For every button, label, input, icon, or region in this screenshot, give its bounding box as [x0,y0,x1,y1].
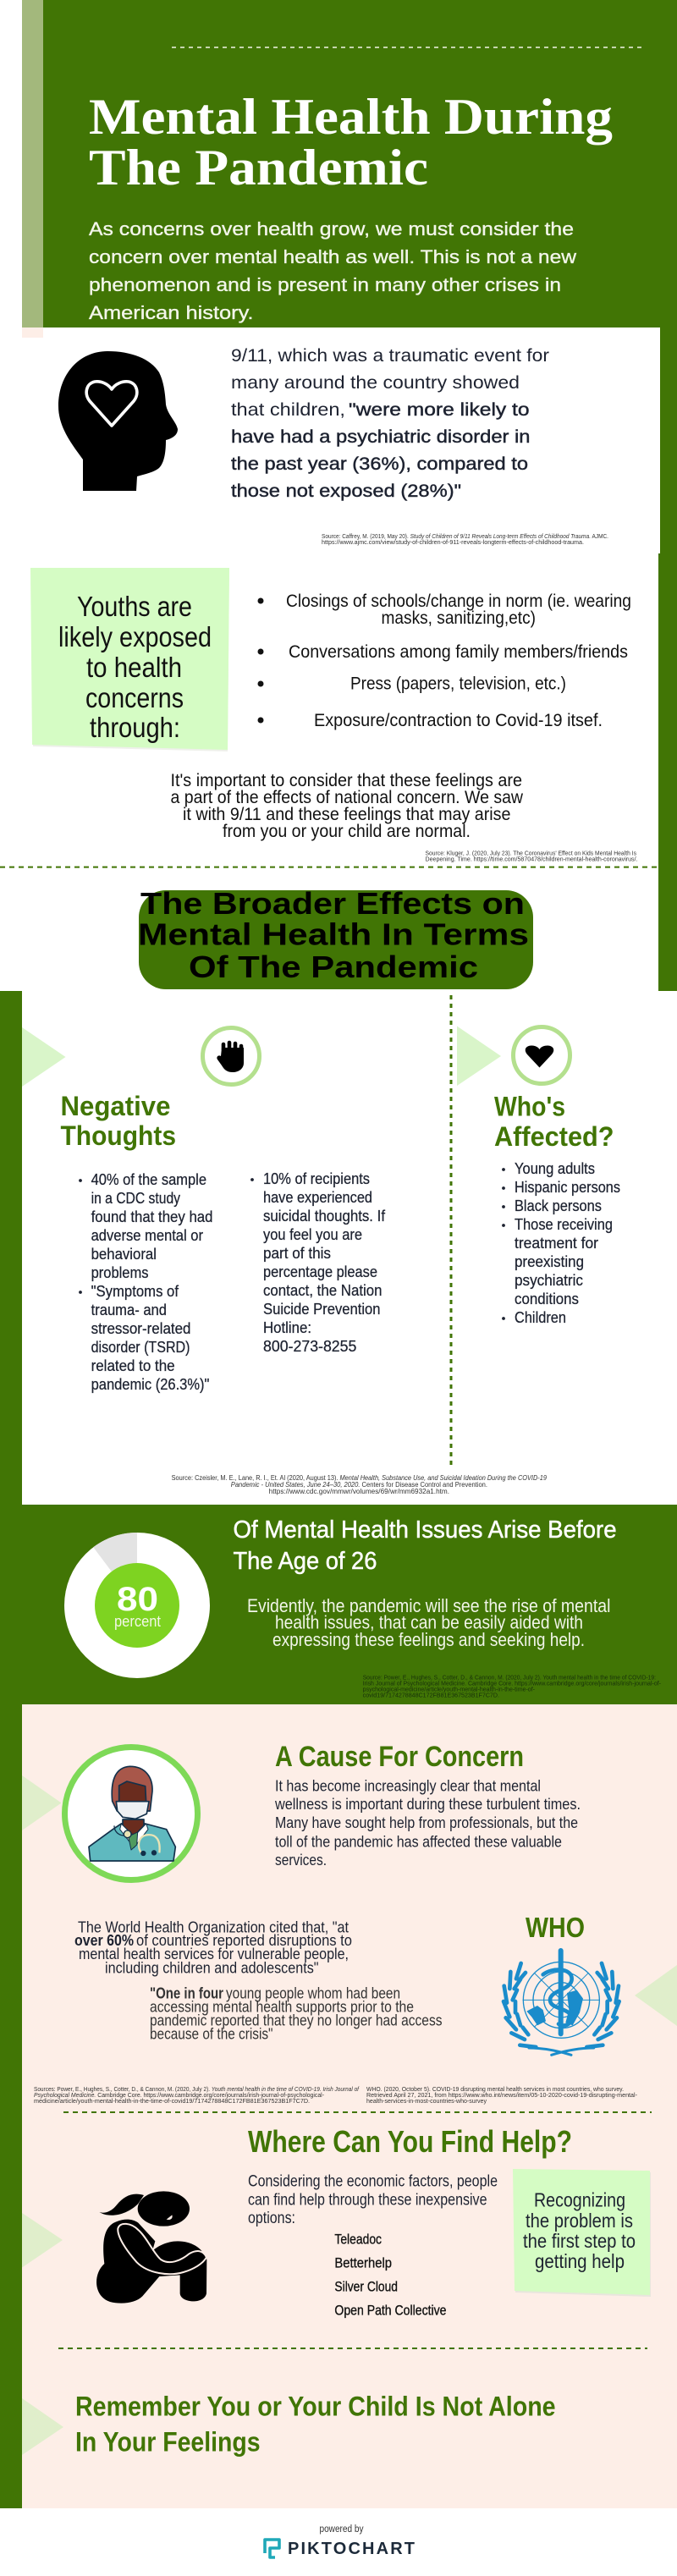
list: negative thoughts statistics: related to the [91,1357,175,1374]
9/11 text: have had a psychiatric disorder in [231,427,530,447]
9/11 text: many around the country showed [231,373,520,393]
icon: piktochart mark [265,2540,279,2557]
text: WHO citation: over 60% [74,1931,134,1949]
list: affected groups: Those receiving [515,1216,613,1233]
text: WHO citation [74,1918,352,1976]
list: affected groups: conditions [515,1291,579,1307]
list: negative thoughts statistics: stressor-related [91,1320,191,1337]
source: Czeisler: https://www.cdc.gov/mmwr/volumes/69/wr/mm6932a1.htm. [269,1488,449,1495]
text: national concern [171,771,524,841]
list: help options: Open Path Collective [334,2302,447,2318]
intro paragraph [89,218,576,323]
source: Power and WHO references [34,2087,638,2105]
arrow: triangle marker [22,2398,63,2455]
text: evidently: expressing these feelings and seeking help. [272,1629,585,1650]
panel: WHO disruption [34,1912,677,2105]
text: evidently: Evidently, the pandemic will see the rise of mental [247,1595,610,1616]
list: negative thoughts statistics: "Symptoms of [91,1283,179,1300]
text: cause paragraph: services. [275,1851,327,1869]
text: one in four quote: because of the crisis" [150,2026,272,2043]
list: affected groups: psychiatric [515,1272,583,1289]
text: WHO citation: mental health services for vulnerable people, [79,1945,349,1962]
list: hotline: you feel you are [263,1226,362,1243]
icon: WHO logo [504,1951,619,2055]
list: negative thoughts statistics: problems [91,1264,149,1281]
icon: sad girl [96,2191,206,2304]
text: one in four quote [150,1985,442,2043]
9/11 text: "were more likely to [349,400,530,420]
list: affected groups: Hispanic persons [515,1179,620,1196]
heading: negative thoughts: Negative [61,1091,171,1121]
panel: youth exposure [30,568,638,863]
list: negative thoughts statistics: disorder (TSRD) [91,1339,190,1356]
list: help options: Silver Cloud [334,2278,398,2295]
arrow: triangle marker [22,1027,66,1087]
text: economic factors: Considering the economic factors, people [248,2173,498,2191]
list: hotline: Hotline: [263,1319,311,1336]
footer: piktochart logo: PIKTOCHART [288,2540,415,2558]
list: hotline: percentage please [263,1263,377,1280]
heading: a cause for concern: A Cause For Concern [275,1741,524,1773]
list: hotline: part of this [263,1245,331,1262]
list: help options [334,2232,447,2318]
callout: youths note: concerns [85,682,184,713]
source: Power [363,1675,662,1698]
list: exposure sources: Closings of schools/change in norm (ie. wearing [286,592,631,611]
heading: WHO: WHO [526,1912,585,1943]
source: Power: Source: Power, E., Hughes, S., Cotter, D., & Cannon, M. (2020, July 2). Youth mental health in the time of COVID-19: [363,1675,656,1681]
heading: not alone: Remember You or Your Child Is Not Alone [75,2392,556,2422]
heading: mental health issues age: The Age of 26 [234,1548,377,1575]
panel: negative thoughts [22,1027,386,1393]
list: negative thoughts statistics: pandemic (26.3%)" [91,1376,209,1393]
footer: piktochart logo [265,2524,415,2558]
text: WHO citation: including children and adolescents" [105,1958,318,1976]
list: hotline: contact, the Nation [263,1282,383,1299]
source: Caffrey: https://www.ajmc.com/view/study-of-children-of-911-reveals-longterm-effects-of-childhood-trauma. [322,540,584,546]
text: cause paragraph: wellness is important during these turbulent times. [274,1795,581,1813]
text: national concern: it with 9/11 and these feelings that may arise [183,805,511,824]
panel: a cause for concern [22,1704,677,2508]
list: negative thoughts statistics: adverse mental or [91,1227,203,1244]
list: affected groups: Children [515,1309,566,1326]
list: exposure sources [257,592,631,730]
9/11 text: that children, [231,400,345,420]
text: economic factors [248,2173,498,2227]
text: evidently [247,1595,610,1650]
list: hotline [250,1170,386,1355]
text: national concern: It's important to consider that these feelings are [171,771,522,790]
text: national concern: from you or your child are normal. [223,822,471,841]
text: WHO citation: The World Health Organization cited that, "at [78,1918,349,1936]
source: Czeisler [172,1474,547,1495]
list: hotline: 800-273-8255 [263,1338,356,1355]
list: affected groups [502,1160,620,1326]
source: Power and WHO references: Psychological Medicine. Cambridge Core. https://www.cambridge.org/core/journals/irish-journal-of-psychological- [34,2093,325,2099]
chart: donut 80 percent: 80 [117,1581,158,1618]
arrow: triangle marker [22,1775,61,1830]
arrow: triangle marker [457,1026,501,1086]
text: one in four quote: young people whom had been [226,1985,400,2002]
callout: youths note: to health [86,652,182,683]
text: national concern: a part of the effects of national concern. We saw [171,788,524,807]
heading: broader effects: The Broader Effects on [140,886,525,921]
list: hotline: have experienced [263,1189,372,1206]
heading: broader effects: Of The Pandemic [189,949,478,984]
heading: who's affected: Who's [494,1092,565,1122]
list: hotline: Suicide Prevention [263,1301,381,1318]
panel: closing message [22,2392,556,2458]
text: evidently: health issues, that can be easily aided with [275,1612,583,1633]
intro paragraph: American history. [89,302,254,323]
intro paragraph: concern over mental health as well. This is not a new [89,246,576,267]
panel: where can you find help [22,2124,651,2318]
heading: where can you find help: Where Can You Find Help? [248,2124,572,2159]
heading: not alone: In Your Feelings [75,2427,261,2458]
icon: stop hand [203,1027,259,1085]
text: cause paragraph: Many have sought help from professionals, but the [275,1814,578,1831]
icon: head with heart [58,351,178,491]
9/11 text: those not exposed (28%)" [231,482,461,501]
heading: who's affected [494,1092,614,1152]
heading: negative thoughts: Thoughts [61,1120,176,1151]
intro paragraph: phenomenon and is present in many other crises in [89,274,561,295]
title: Mental Health During [89,89,613,145]
source: Czeisler: Source: Czeisler, M. E., Lane, R. I., Et. Al (2020, August 13). Mental Health, Substance Use, and Suicidal Ideation During the COVID-19 [172,1474,547,1482]
text: cause paragraph: toll of the pandemic has affected these valuable [275,1833,562,1850]
title [89,89,613,195]
panel: title header [22,0,677,328]
list: exposure sources: Conversations among family members/friends [289,642,628,662]
source: Caffrey [322,534,608,546]
source: Kluger [425,851,638,863]
source: Caffrey: Source: Caffrey, M. (2019, May 20). Study of Children of 9/11 Reveals Long-term Effects of Childhood Trauma. AJMC. [322,534,608,540]
callout: recognizing note [513,2169,651,2297]
heading: broader effects [138,886,533,989]
text: WHO citation: of countries reported disruptions to [136,1931,352,1949]
list: negative thoughts statistics: in a CDC study [91,1190,180,1207]
source: Power: psychological-medicine/article/youth-mental-health-in-the-time-of- [363,1687,536,1693]
heading: broader effects: Mental Health In Terms [138,917,529,951]
footer: piktochart logo: powered by [320,2524,364,2535]
text: economic factors: options: [248,2210,295,2227]
list: negative thoughts statistics: 40% of the sample [91,1171,206,1188]
9/11 text: the past year (36%), compared to [231,454,528,474]
panel: 80 percent statistic [22,1505,677,1704]
source: Kluger: Source: Kluger, J. (2020, July 23). The Coronavirus' Effect on Kids Mental Health Is [425,851,636,857]
9/11 text: 9/11, which was a traumatic event for [231,346,549,366]
list: exposure sources: masks, sanitizing,etc) [381,608,536,628]
list: affected groups: Young adults [515,1160,595,1177]
heading: not alone [75,2392,556,2458]
heading: mental health issues age: Of Mental Health Issues Arise Before [234,1516,617,1544]
text: one in four quote: "One in four [150,1985,223,2002]
callout: youths note: Youths are [77,591,192,622]
panel: 9/11 fact [58,346,608,546]
callout: youths note [30,568,229,751]
list: affected groups: Black persons [515,1197,602,1214]
source: Power: covid19/7174278848C172FB81E367523B1F7C7D. [363,1693,499,1698]
text: cause paragraph [274,1776,581,1869]
text: one in four quote: accessing mental health supports prior to the [150,1999,414,2016]
callout: recognizing note: the problem is [526,2210,633,2232]
list: hotline: suicidal thoughts. If [263,1208,386,1225]
title: The Pandemic [89,140,428,195]
heading: mental health issues age [234,1516,617,1575]
callout: youths note: likely exposed [58,621,212,652]
list: negative thoughts statistics [79,1171,213,1393]
list: negative thoughts statistics: behavioral [91,1246,157,1263]
source: Power and WHO references: Sources: Power, E., Hughes, S., Cotter, D., & Cannon, M. (2020, July 2). Youth mental health in the time of COVID-19. Irish Journal of [34,2087,360,2093]
source: Power and WHO references: health-services-in-most-countries-who-survey [366,2099,487,2105]
list: affected groups: preexisting [515,1253,584,1270]
text: one in four quote: pandemic reported that they no longer had access [150,2012,442,2029]
source: Kluger: Deepening. Time. https://time.com/5870478/children-mental-health-coronavirus/. [425,857,638,863]
list: negative thoughts statistics: found that they had [91,1208,212,1225]
source: Czeisler: Pandemic - United States, June 24–30, 2020. Centers for Disease Control and Prevention. [231,1481,487,1489]
list: exposure sources: Press (papers, television, etc.) [350,674,566,694]
text: economic factors: can find help through these inexpensive [248,2192,487,2210]
icon: doctor [64,1747,198,1880]
callout: recognizing note: Recognizing [534,2189,625,2211]
list: help options: Teleadoc [334,2232,382,2248]
source: Power and WHO references: Retrieved April 27, 2021, from https://www.who.int/news/item/05-10-2020-covid-19-disrupting-mental- [366,2093,638,2099]
callout: recognizing note: getting help [535,2250,625,2272]
9/11 text [231,346,549,501]
heading: negative thoughts [61,1091,176,1151]
intro paragraph: As concerns over health grow, we must consider the [89,218,574,239]
chart: donut 80 percent: percent [114,1613,161,1630]
callout: recognizing note: the first step to [523,2230,636,2252]
list: help options: Betterhelp [334,2254,392,2271]
list: exposure sources: Exposure/contraction to Covid-19 itsef. [314,711,603,730]
panel: who is affected [457,1026,620,1326]
arrow: triangle marker [22,2213,63,2268]
source: Power and WHO references: WHO. (2020, October 5). COVID-19 disrupting mental health services in most countries, who survey. [366,2087,624,2093]
list: affected groups: treatment for [515,1235,598,1252]
list: negative thoughts statistics: trauma- and [91,1302,167,1318]
heading: who's affected: Affected? [494,1121,614,1152]
source: Power: Irish Journal of Psychological Medicine. Cambridge Core. https://www.cambridge.org/core/journals/irish-journal-of- [363,1681,662,1687]
icon: heart [513,1027,570,1083]
chart: donut 80 percent [64,1533,210,1678]
list: hotline: 10% of recipients [263,1170,370,1187]
arrow: triangle marker right [635,1965,677,2026]
text: cause paragraph: It has become increasingly clear that mental [275,1776,541,1794]
source: Power and WHO references: medicine/article/youth-mental-health-in-the-time-of-covid19/7174278848C172FB81E367523B1F7C7D. [34,2099,310,2105]
callout: youths note: through: [90,712,180,743]
